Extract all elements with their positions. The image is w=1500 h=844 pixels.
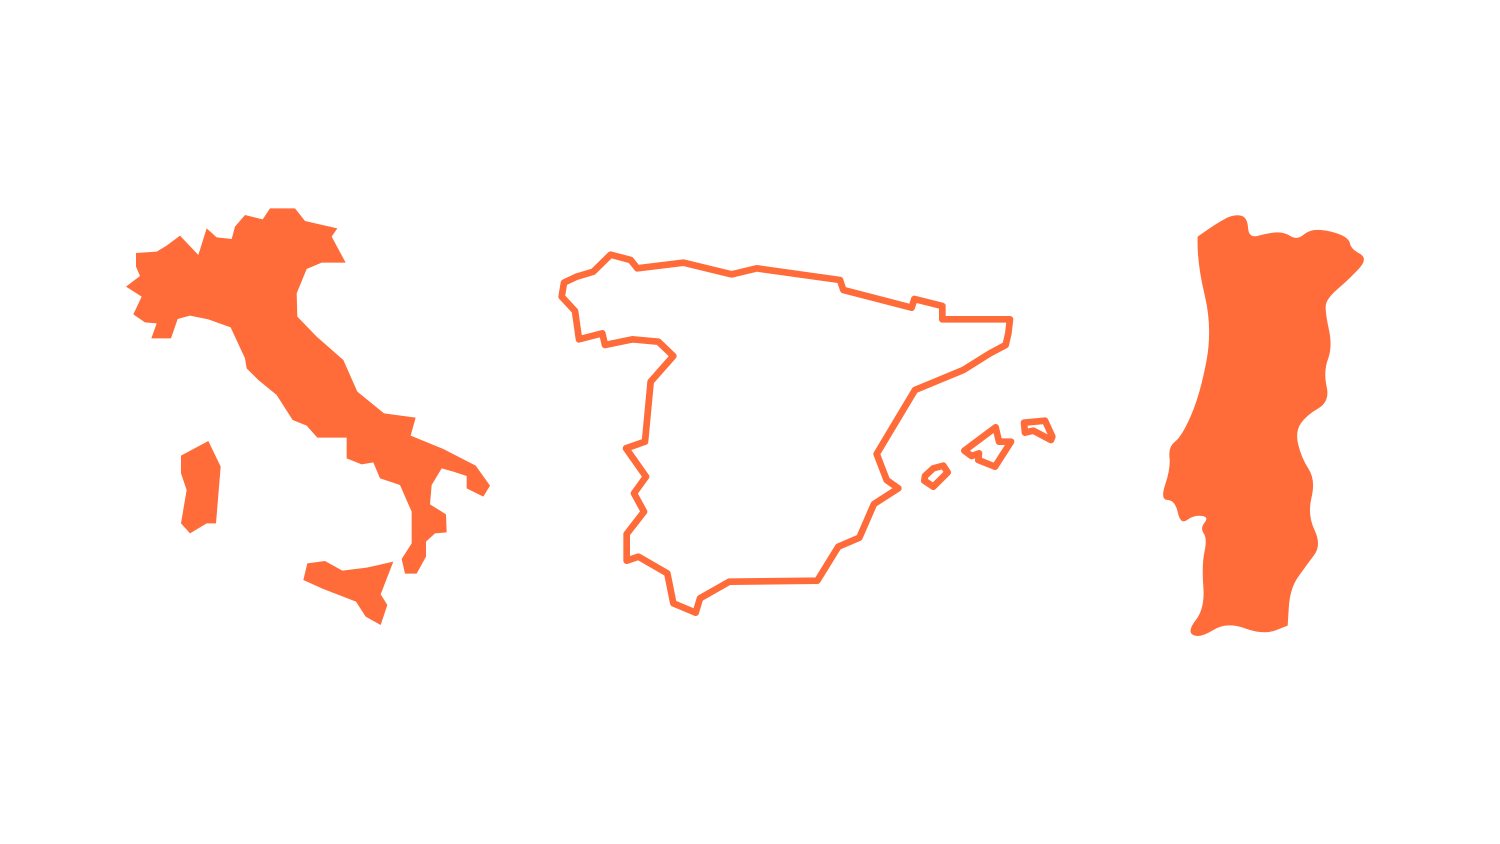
Sardinia	[181, 441, 221, 533]
Mallorca outline	[964, 427, 1011, 467]
map: Spain, outline only	[562, 255, 1052, 613]
Italy mainland	[126, 208, 490, 574]
Sicily	[303, 561, 393, 625]
Ibiza outline	[924, 466, 948, 487]
Portugal shape	[1163, 215, 1364, 636]
map: Italy, solid fill	[126, 208, 490, 625]
Menorca outline	[1024, 421, 1052, 440]
Spain mainland outline	[562, 255, 1010, 613]
map: Portugal, solid fill	[1163, 215, 1364, 636]
